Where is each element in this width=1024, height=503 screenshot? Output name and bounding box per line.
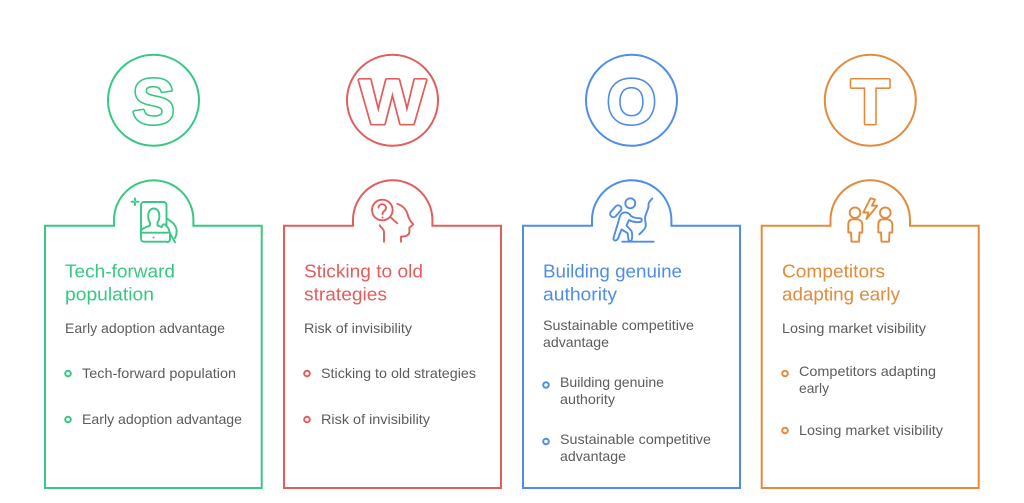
panel: Strengths — [45, 55, 262, 488]
summary text: Risk of invisibility — [304, 320, 412, 336]
bullet item 1: early — [799, 380, 829, 396]
letter circle T: T — [851, 68, 890, 138]
heading — [65, 262, 175, 304]
bullet item 2: advantage — [560, 448, 626, 464]
summary text: advantage — [543, 334, 609, 350]
card outline — [762, 180, 979, 488]
heading — [543, 262, 682, 304]
bullet item 1: Building genuine — [560, 374, 664, 390]
summary text: Losing market visibility — [782, 320, 926, 336]
letter circle S — [108, 55, 199, 146]
bullet item 2: Sustainable competitive — [560, 431, 711, 447]
heading: Tech-forward — [65, 262, 175, 282]
icon: two people with lightning bolt — [848, 198, 892, 242]
card outline — [284, 180, 501, 488]
letter circle O: O — [607, 68, 656, 138]
heading — [782, 262, 900, 304]
letter circle S: S — [132, 68, 175, 138]
panel: Threats — [762, 55, 979, 488]
bullet item 1: Tech-forward population — [82, 365, 236, 381]
icon: head with magnifier and question mark — [372, 200, 413, 242]
letter circle W: W — [360, 68, 426, 138]
heading: strategies — [304, 284, 387, 304]
letter circle O: O — [607, 68, 656, 138]
heading: authority — [543, 284, 617, 304]
bullet item 2 — [543, 431, 711, 464]
heading: Sticking to old — [304, 262, 423, 282]
letter circle S: S — [132, 68, 175, 138]
panel: Opportunities — [523, 55, 740, 488]
heading: adapting early — [782, 284, 900, 304]
summary text: Early adoption advantage — [65, 320, 225, 336]
bullet item 1 — [543, 374, 664, 407]
heading: population — [65, 284, 154, 304]
bullet item 1: Sticking to old strategies — [321, 365, 476, 381]
bullet item 1: Competitors adapting — [799, 363, 936, 379]
heading: Competitors — [782, 262, 885, 282]
bullet item 2: Losing market visibility — [799, 422, 943, 438]
card outline — [45, 180, 262, 488]
bullet item 2: Early adoption advantage — [82, 411, 242, 427]
letter circle W: W — [360, 68, 426, 138]
summary text: Sustainable competitive — [543, 317, 694, 333]
bullet item 1: authority — [560, 391, 615, 407]
bullet item 1 — [782, 363, 936, 396]
summary text — [543, 317, 694, 350]
icon: person on smartphone — [132, 198, 177, 242]
card outline — [523, 180, 740, 488]
letter circle T: T — [851, 68, 890, 138]
heading — [304, 262, 423, 304]
bullet item 2: Risk of invisibility — [321, 411, 430, 427]
letter circle O — [586, 55, 677, 146]
icon: climber with rope — [609, 198, 654, 242]
panel: Weaknesses — [284, 55, 501, 488]
letter circle W — [347, 55, 438, 146]
heading: Building genuine — [543, 262, 682, 282]
letter circle T — [825, 55, 916, 146]
